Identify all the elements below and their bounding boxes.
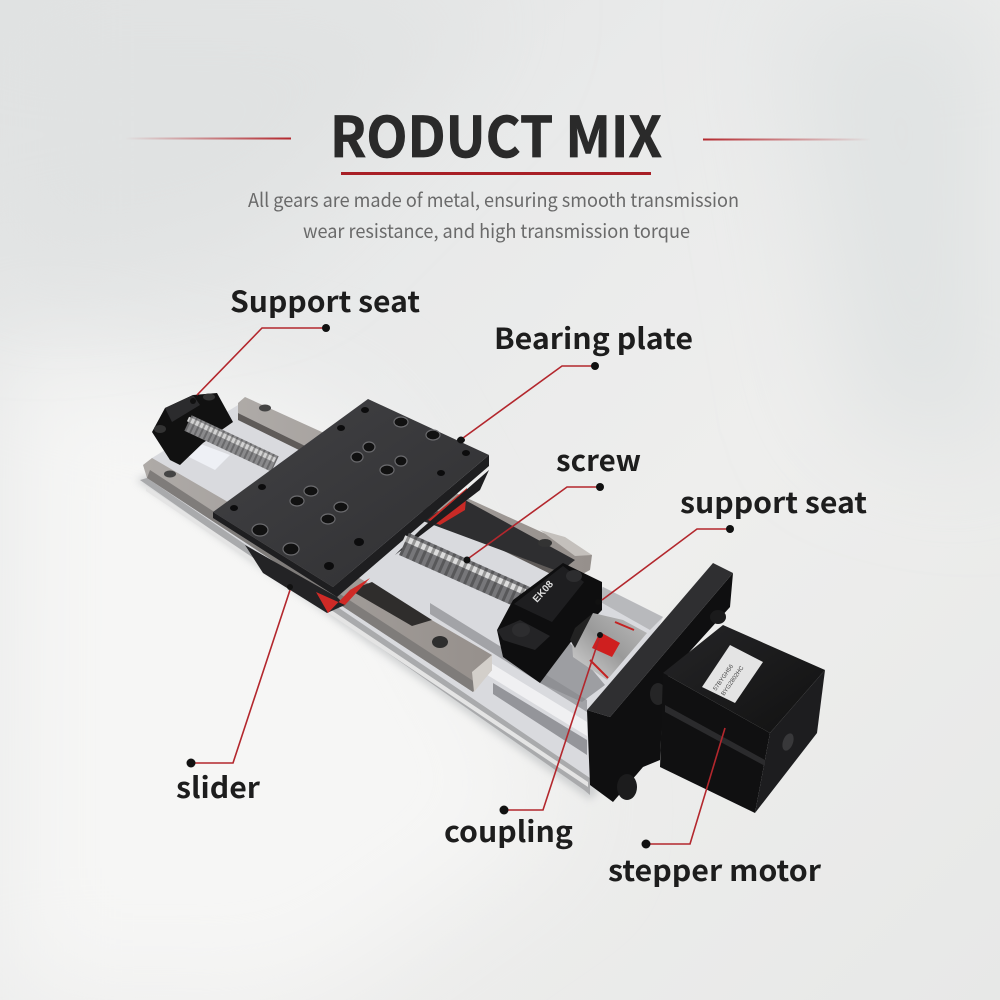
motor label sticker: 57BYGH56 bbox=[713, 663, 735, 692]
callout: Support seat: Support seat bbox=[230, 279, 420, 321]
callout: support seat bbox=[595, 480, 867, 605]
callout: Bearing plate bbox=[458, 316, 693, 444]
callout: Bearing plate: Bearing plate bbox=[494, 316, 693, 358]
callout: screw bbox=[464, 438, 641, 564]
far end support seat bbox=[152, 393, 233, 465]
linear module product illustration bbox=[136, 393, 825, 813]
back linear rail bbox=[238, 397, 592, 586]
near ball screw section bbox=[404, 538, 525, 598]
stepper motor bbox=[660, 625, 825, 813]
motor label sticker bbox=[702, 645, 763, 703]
callout: support seat: support seat bbox=[680, 480, 867, 522]
subtitle text bbox=[248, 186, 739, 244]
seat marking: EK08 bbox=[531, 579, 556, 605]
callout: coupling bbox=[444, 632, 603, 851]
motor mount plate bbox=[587, 563, 733, 802]
callout: slider bbox=[176, 584, 293, 807]
subtitle text: wear resistance, and high transmission torque bbox=[303, 217, 690, 244]
callout: stepper motor: stepper motor bbox=[608, 848, 821, 890]
callout: screw: screw bbox=[556, 438, 641, 480]
near end support seat bbox=[497, 563, 602, 683]
callout: coupling: coupling bbox=[444, 809, 573, 851]
callout: slider: slider bbox=[176, 765, 260, 807]
callout: Support seat bbox=[190, 279, 420, 404]
aluminium extrusion base bbox=[136, 405, 663, 800]
front linear rail bbox=[143, 458, 492, 692]
left decorative title line bbox=[125, 138, 291, 140]
title underline bbox=[341, 172, 651, 175]
coupling bbox=[570, 613, 647, 680]
right decorative title line bbox=[703, 138, 871, 140]
bearing plate bbox=[213, 399, 489, 597]
motor label sticker: BYG2802HC bbox=[721, 665, 746, 697]
far ball screw section bbox=[188, 419, 275, 464]
title: RODUCT MIX bbox=[330, 93, 662, 174]
callout: stepper motor bbox=[608, 728, 821, 890]
subtitle text: All gears are made of metal, ensuring smooth transmission bbox=[248, 186, 739, 213]
carriage slider blocks bbox=[245, 470, 489, 613]
